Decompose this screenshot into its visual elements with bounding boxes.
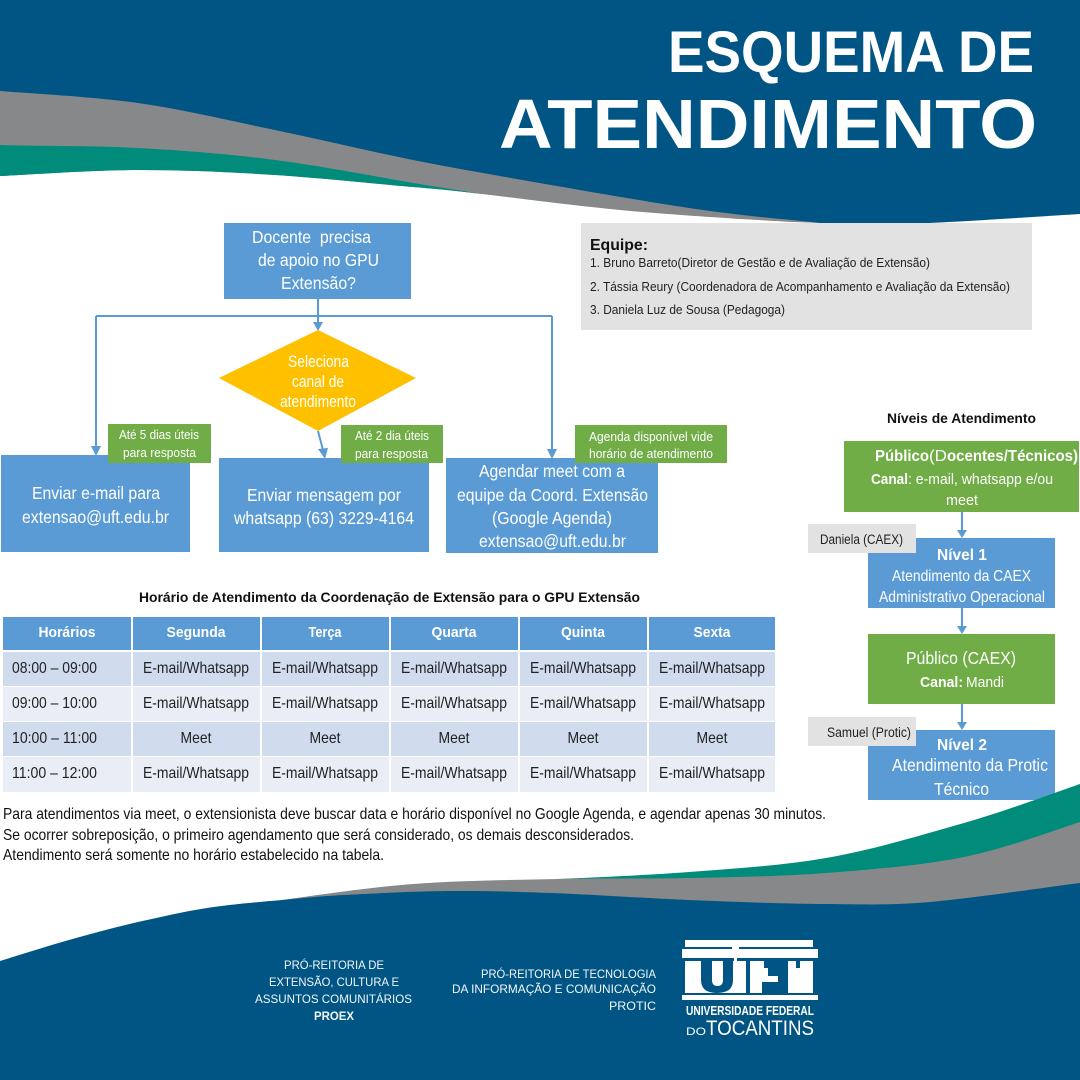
logo: UFT: TOCANTINS <box>706 1017 814 1040</box>
logo: UFT <box>682 940 818 1040</box>
flow box: meet: (Google Agenda) <box>492 508 612 528</box>
note: agenda: Agenda disponível vide <box>589 430 713 444</box>
header wave: gray band <box>0 80 881 225</box>
decision diamond: atendimento <box>280 393 356 411</box>
note: 5 dias: Até 5 dias úteis <box>119 428 199 442</box>
title <box>499 20 1037 163</box>
table header row: Terça <box>308 624 342 641</box>
footer text: PROEX: ASSUNTOS COMUNITÁRIOS <box>255 991 412 1006</box>
footer text: PROTIC: DA INFORMAÇÃO E COMUNICAÇÃO <box>452 982 656 996</box>
flow box: e-mail: Enviar e-mail para <box>32 483 160 503</box>
note: agenda <box>575 425 727 463</box>
table row 10:00: Meet <box>180 730 212 747</box>
team panel <box>581 223 1032 330</box>
notes text: Para atendimentos via meet, o extensionista deve buscar data e horário disponível no Google Agenda, e agendar apenas 30 minutos. <box>3 806 826 823</box>
table header row: Quarta <box>432 624 477 641</box>
logo: UFT: UNIVERSIDADE FEDERAL <box>686 1004 814 1018</box>
tag: Samuel <box>808 717 916 746</box>
tag: Daniela <box>808 524 916 553</box>
table row 08:00: 08:00 – 09:00 <box>12 660 97 677</box>
level box: nível 1: Nível 1 <box>937 547 987 564</box>
table row 10:00 <box>3 722 775 756</box>
footer wave: gray band <box>282 822 1080 910</box>
flow box: docente <box>224 223 411 299</box>
table row 10:00: Meet <box>568 730 599 747</box>
level box: nível 2: Atendimento da Protic <box>892 755 1048 775</box>
team panel: 2. Tássia Reury (Coordenadora de Acompanhamento e Avaliação da Extensão) <box>590 280 1010 294</box>
table row 11:00: E-mail/Whatsapp <box>401 765 507 782</box>
table row 11:00: E-mail/Whatsapp <box>530 765 636 782</box>
table row 08:00: E-mail/Whatsapp <box>143 660 249 677</box>
level box: público docentes: : e-mail, whatsapp e/ou <box>908 471 1053 488</box>
footer wave: teal band <box>558 784 1080 890</box>
flow box: whatsapp: Enviar mensagem por <box>247 485 401 505</box>
header wave: blue background <box>0 0 1080 225</box>
note: 5 dias: para resposta <box>123 446 196 460</box>
table row 08:00: E-mail/Whatsapp <box>401 660 507 677</box>
decision diamond: canal de <box>292 373 344 391</box>
tag: Samuel: Samuel (Protic) <box>827 725 911 740</box>
table row 11:00 <box>3 757 775 792</box>
table row 10:00: 10:00 – 11:00 <box>12 730 97 747</box>
table row 08:00 <box>3 652 775 686</box>
flow box: meet: extensao@uft.edu.br <box>479 531 626 551</box>
level box: público CAEX: Público (CAEX) <box>906 648 1016 668</box>
flow box: e-mail: extensao@uft.edu.br <box>22 507 169 527</box>
footer text: PROEX <box>255 957 412 1023</box>
footer text: PROEX: PRÓ-REITORIA DE <box>284 957 384 972</box>
table header row <box>3 617 775 650</box>
notes text: Se ocorrer sobreposição, o primeiro agendamento que será considerado, os demais desconsiderados. <box>3 827 634 844</box>
note: 2 dias: Até 2 dia úteis <box>355 429 429 443</box>
level box: nível 1: Atendimento da CAEX <box>892 568 1031 585</box>
footer wave: blue background <box>0 883 1080 1080</box>
level box: nível 2: Nível 2 <box>937 737 987 754</box>
table row 09:00: 09:00 – 10:00 <box>12 695 97 712</box>
level box: nível 2: Técnico <box>934 779 989 799</box>
note: 2 dias: para resposta <box>355 447 428 461</box>
table row 09:00: E-mail/Whatsapp <box>530 695 636 712</box>
footer text: PROTIC <box>452 966 656 1013</box>
team panel: Equipe: <box>590 237 648 254</box>
table row 10:00: Meet <box>438 730 470 747</box>
level box: público docentes: meet <box>946 492 979 509</box>
table header row: Horários <box>38 624 96 641</box>
flow box: meet: Agendar meet com a <box>479 461 625 481</box>
level box: público CAEX: Mandi <box>966 674 1004 691</box>
flowchart connectors <box>91 299 557 459</box>
level box: público docentes: Canal <box>871 471 908 488</box>
logo: UFT: DO <box>686 1026 707 1038</box>
schedule heading: Horário de Atendimento da Coordenação de Extensão para o GPU Extensão <box>139 589 640 605</box>
table header row: Segunda <box>166 624 226 641</box>
notes text <box>3 806 826 864</box>
flow box: docente: Extensão? <box>281 273 356 293</box>
table row 08:00: E-mail/Whatsapp <box>659 660 765 677</box>
table row 11:00: 11:00 – 12:00 <box>12 765 97 782</box>
footer text: PROEX: PROEX <box>314 1009 354 1023</box>
level box: público CAEX: Canal: <box>920 674 963 691</box>
table row 08:00: E-mail/Whatsapp <box>272 660 378 677</box>
table row 09:00: E-mail/Whatsapp <box>143 695 249 712</box>
table row 09:00: E-mail/Whatsapp <box>272 695 378 712</box>
decision diamond <box>219 330 416 431</box>
table row 09:00: E-mail/Whatsapp <box>659 695 765 712</box>
level box: público docentes: Público <box>875 448 929 465</box>
level box: nível 2 <box>868 730 1055 800</box>
title: ATENDIMENTO <box>499 85 1037 163</box>
table row 11:00: E-mail/Whatsapp <box>659 765 765 782</box>
flow box: docente: Docente precisa <box>252 227 371 247</box>
table row 11:00: E-mail/Whatsapp <box>143 765 249 782</box>
table row 09:00: E-mail/Whatsapp <box>401 695 507 712</box>
footer text: PROEX: EXTENSÃO, CULTURA E <box>269 975 399 989</box>
table row 10:00: Meet <box>696 730 728 747</box>
header wave: teal band <box>0 145 482 194</box>
level box: público docentes <box>844 441 1079 512</box>
flow box: meet <box>446 458 658 553</box>
team panel: 3. Daniela Luz de Sousa (Pedagoga) <box>590 303 785 317</box>
flow box: whatsapp: whatsapp (63) 3229-4164 <box>233 508 414 528</box>
note: agenda: horário de atendimento <box>589 447 713 461</box>
level box: nível 1: Administrativo Operacional <box>879 589 1045 606</box>
footer text: PROTIC: PRÓ-REITORIA DE TECNOLOGIA <box>481 966 656 981</box>
flow box: e-mail <box>1 455 190 552</box>
table row 08:00: E-mail/Whatsapp <box>530 660 636 677</box>
table row 11:00: E-mail/Whatsapp <box>272 765 378 782</box>
tag: Daniela: Daniela (CAEX) <box>820 532 903 547</box>
table row 09:00 <box>3 687 775 721</box>
team panel: 1. Bruno Barreto(Diretor de Gestão e de Avaliação de Extensão) <box>590 256 930 270</box>
flow box: docente: de apoio no GPU <box>258 250 379 270</box>
table header row: Sexta <box>694 624 731 641</box>
levels connectors <box>957 512 967 730</box>
level box: público docentes: (D <box>929 448 947 465</box>
footer text: PROTIC: PROTIC <box>609 999 656 1013</box>
decision diamond: Seleciona <box>288 353 350 371</box>
flow box: meet: equipe da Coord. Extensão <box>457 485 648 505</box>
levels heading: Níveis de Atendimento <box>887 410 1036 426</box>
note: 2 dias <box>341 425 443 463</box>
title: ESQUEMA DE <box>668 20 1034 85</box>
table row 10:00: Meet <box>310 730 341 747</box>
flow box: whatsapp <box>219 458 429 552</box>
level box: público CAEX <box>868 634 1055 704</box>
notes text: Atendimento será somente no horário estabelecido na tabela. <box>3 847 384 864</box>
schedule table <box>3 617 775 792</box>
table header row: Quinta <box>561 624 606 641</box>
level box: nível 1 <box>868 538 1055 608</box>
note: 5 dias <box>108 424 211 463</box>
